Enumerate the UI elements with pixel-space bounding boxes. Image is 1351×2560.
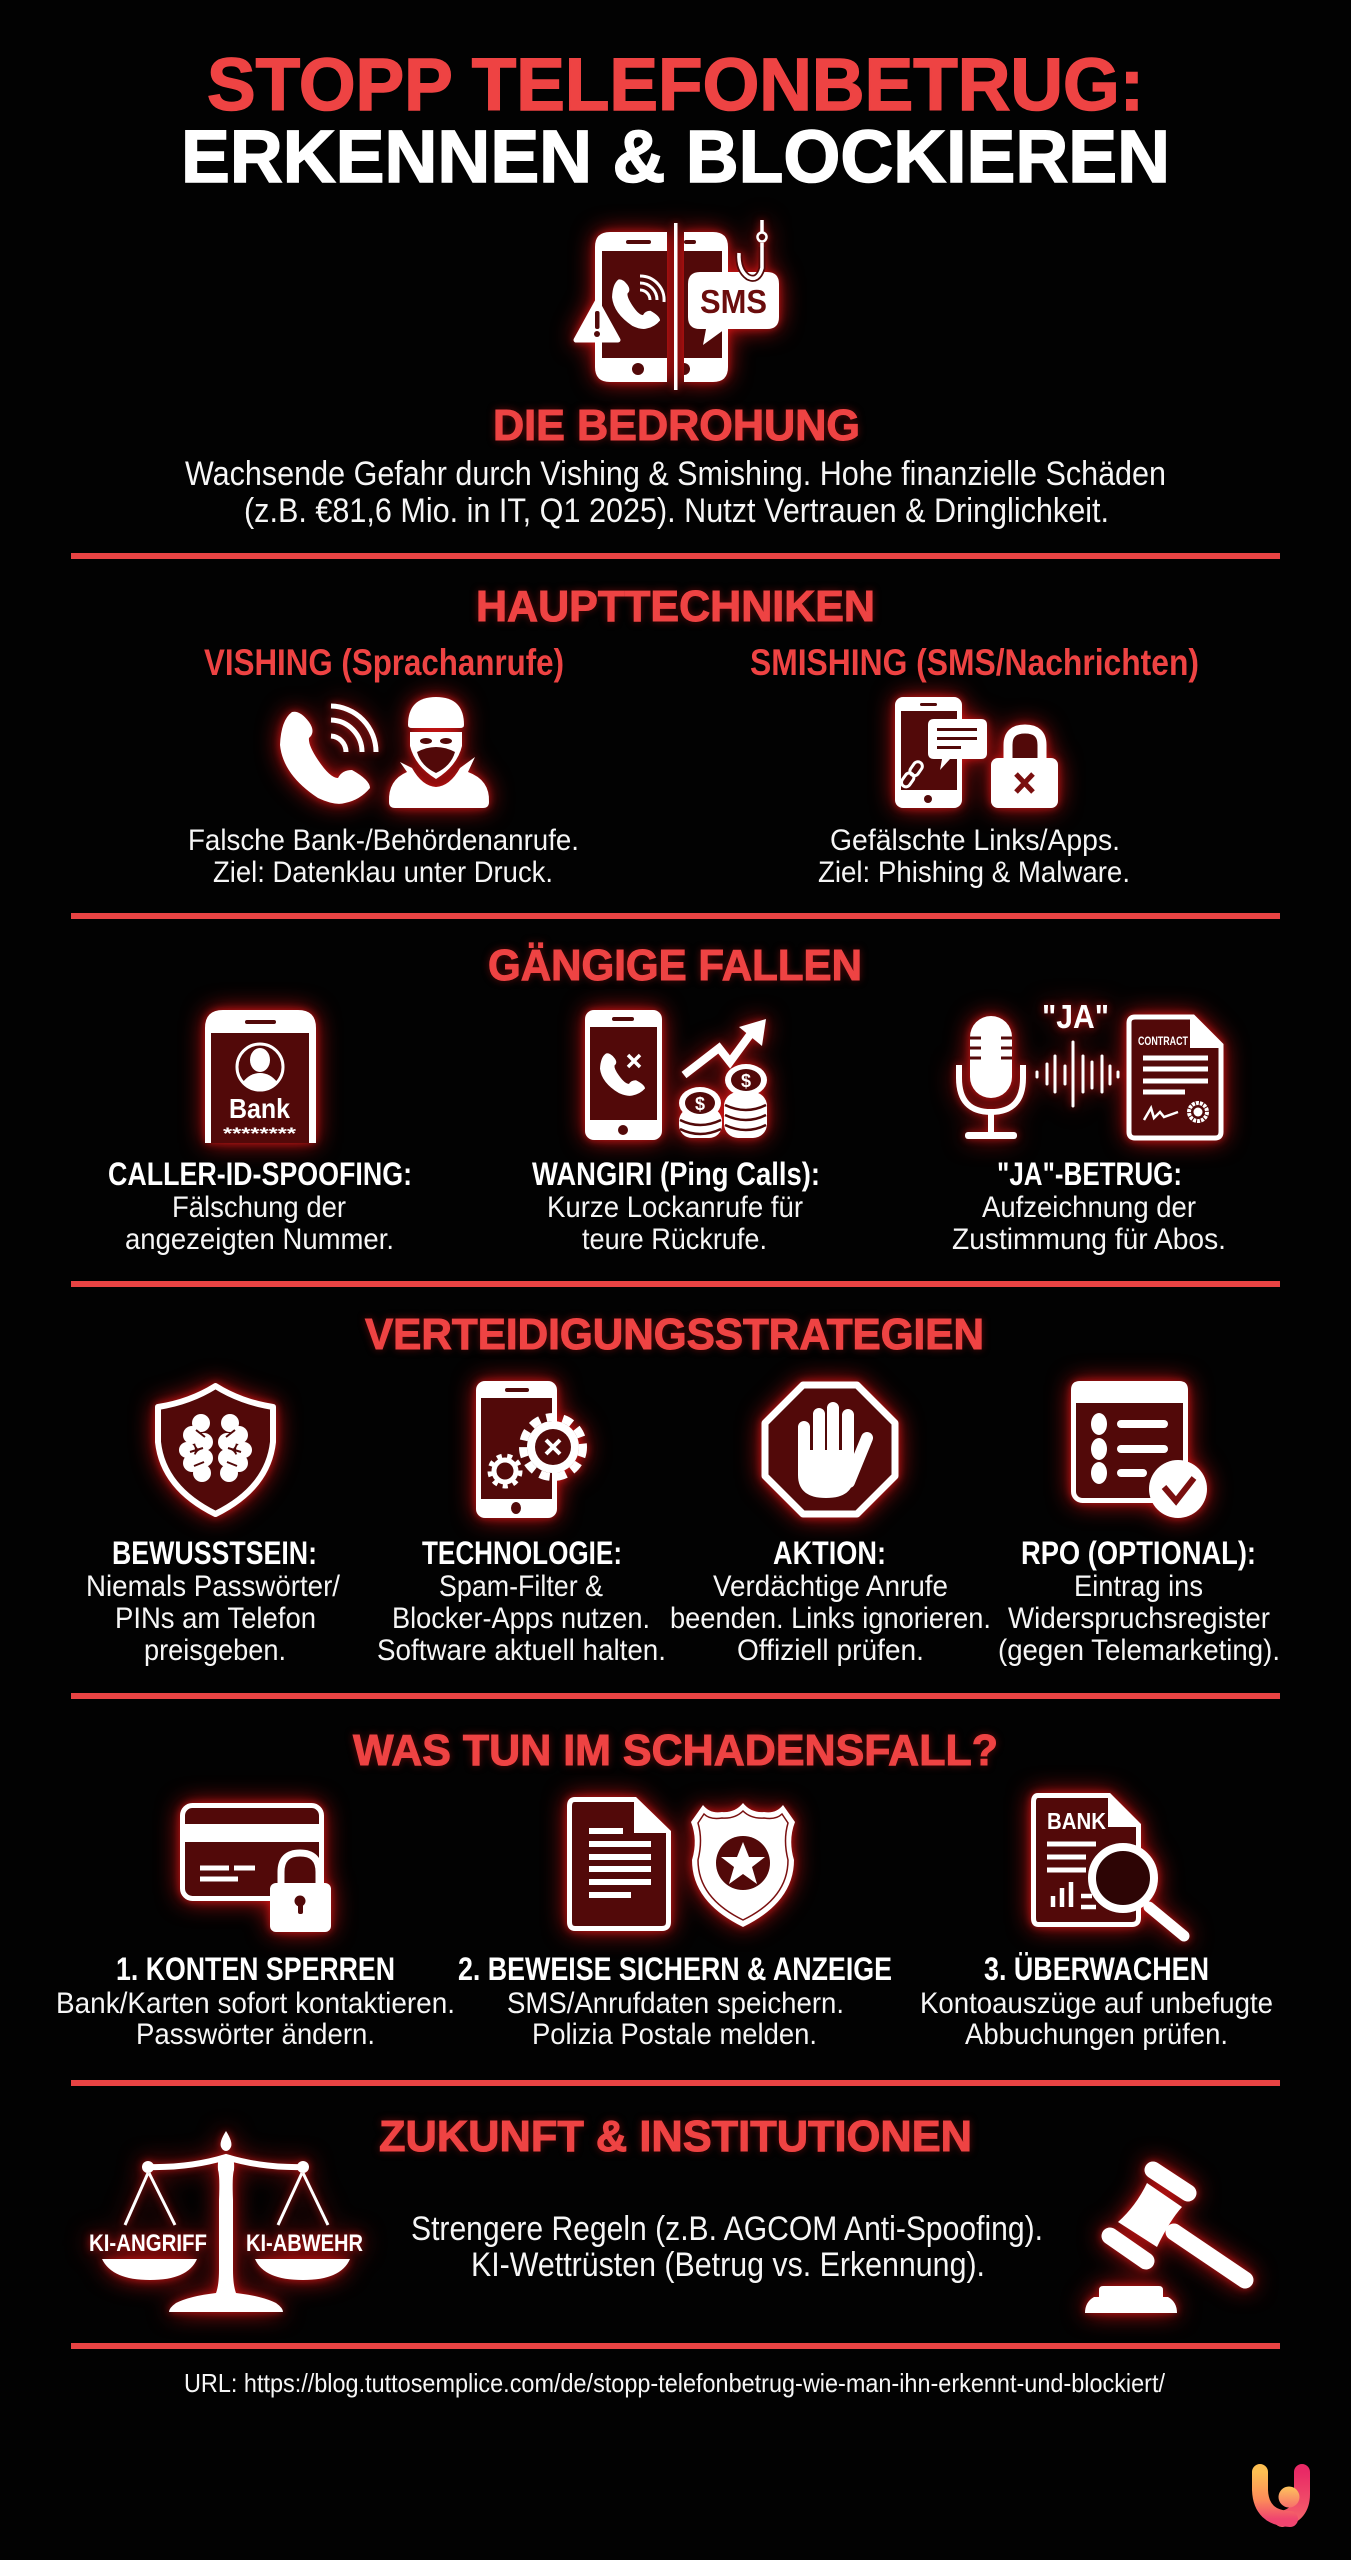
text: future description [411,2210,1043,2284]
icon: wangiri phone, rising arrow, coins: $ [741,1071,751,1091]
text: action: beenden. Links ignorieren. [670,1602,991,1635]
text: source URL: URL: https://blog.tuttosemplice.com/de/stopp-telefonbetrug-wie-man-ihn-erkennt-und-blockiert/ [184,2368,1166,2398]
icon: document and police badge [570,1798,795,1928]
text: technology [377,1535,666,1667]
icon: checklist with check mark [1071,1381,1207,1518]
text: step 2: SMS/Anrufdaten speichern. [507,1987,844,2020]
icon: spoofed bank caller [205,1010,316,1143]
icon: microphone, JA waveform, contract: "JA" [1042,998,1109,1035]
text: technology: Spam-Filter & [439,1570,603,1603]
panel: defense strategies [86,1310,1280,1667]
icon: judge gavel [1085,2170,1245,2313]
icon: shield with brain [158,1386,273,1514]
icon: stop sign with hand [765,1385,895,1514]
text: technology: Blocker-Apps nutzen. [392,1602,650,1635]
text: step 3: Abbuchungen prüfen. [965,2018,1228,2051]
panel: threat [185,401,1166,530]
text: smishing description [818,824,1130,889]
icon: phone with gears [476,1381,583,1518]
icon: spoofed bank caller: ******** [223,1124,297,1143]
text: step 3 [920,1951,1273,2051]
heading: threat: DIE BEDROHUNG [493,401,860,450]
text: vishing description: Ziel: Datenklau unter Druck. [213,856,553,889]
subheading: vishing: VISHING (Sprachanrufe) [204,642,564,683]
icon: brand logo [1260,2472,1302,2519]
text: RPO [998,1535,1280,1667]
text: RPO: Widerspruchsregister [1008,1602,1270,1635]
icon: wangiri phone, rising arrow, coins: $ [695,1094,705,1114]
text: step 2: 2. BEWEISE SICHERN & ANZEIGE [458,1951,892,1987]
panel: what to do in case of damage [56,1726,1273,2051]
text: vishing description: Falsche Bank-/Behördenanrufe. [188,824,579,857]
text: step 3: 3. ÜBERWACHEN [984,1951,1209,1987]
text: technology: Software aktuell halten. [377,1634,666,1667]
text: caller-id spoofing [108,1156,412,1256]
text: wangiri [532,1156,820,1256]
text: RPO: Eintrag ins [1074,1570,1203,1603]
icon: split phone with call, warning, SMS and hook [576,220,779,390]
text: RPO: (gegen Telemarketing). [998,1634,1280,1667]
icon: scales of AI attack vs defense: KI-ANGRIFF [89,2230,207,2257]
text: awareness: PINs am Telefon [115,1602,316,1635]
text: wangiri: Kurze Lockanrufe für [547,1191,803,1224]
panel: future and institutions [89,2112,1245,2313]
icon: bank card with padlock [182,1806,331,1932]
heading: main techniques: HAUPTTECHNIKEN [476,582,875,631]
text: threat description: Wachsende Gefahr durch Vishing & Smishing. Hohe finanzielle Schäden [185,455,1166,493]
panel: main techniques [188,582,1199,889]
icon: spoofed bank caller: Bank [229,1093,290,1124]
text: step 1 [56,1951,455,2051]
text: awareness [86,1535,341,1667]
heading: future and institutions: ZUKUNFT & INSTITUTIONEN [379,2112,972,2161]
text: step 2: Polizia Postale melden. [532,2018,817,2051]
text: JA scam: "JA"-BETRUG: [997,1156,1182,1192]
panel: common traps [108,941,1226,1256]
icon: phone call and masked thief [280,697,489,808]
title [181,43,1170,198]
subheading: smishing: SMISHING (SMS/Nachrichten) [750,642,1199,683]
icon: microphone, JA waveform, contract [959,998,1221,1139]
text: wangiri: teure Rückrufe. [582,1223,767,1256]
text: action [670,1535,991,1667]
text: awareness: BEWUSSTSEIN: [112,1535,317,1571]
text: smishing description: Gefälschte Links/Apps. [830,824,1120,857]
text: awareness: Niemals Passwörter/ [86,1570,341,1603]
icon: microphone, JA waveform, contract: CONTRACT [1138,1036,1188,1048]
icon: bank statement with magnifier: BANK [1047,1808,1106,1834]
text: vishing description [188,824,579,889]
icon: scales of AI attack vs defense: KI-ABWEHR [246,2230,363,2257]
icon: bank statement with magnifier [1034,1794,1184,1936]
text: step 1: Passwörter ändern. [136,2018,375,2051]
text: technology: TECHNOLOGIE: [422,1535,622,1571]
icon: wangiri phone, rising arrow, coins [585,1010,767,1140]
text: step 1: 1. KONTEN SPERREN [116,1951,395,1987]
text: step 3: Kontoauszüge auf unbefugte [920,1987,1273,2020]
text: future description: KI-Wettrüsten (Betrug vs. Erkennung). [471,2246,985,2284]
text: future description: Strengere Regeln (z.B. AGCOM Anti-Spoofing). [411,2210,1043,2248]
text: step 2 [458,1951,892,2051]
text: threat description: (z.B. €81,6 Mio. in IT, Q1 2025). Nutzt Vertrauen & Dringlichkeit. [244,492,1109,530]
text: JA scam: Zustimmung für Abos. [952,1223,1226,1256]
text: action: Verdächtige Anrufe [713,1570,948,1603]
text: action: AKTION: [773,1535,886,1571]
text: action: Offiziell prüfen. [737,1634,924,1667]
text: caller-id spoofing: angezeigten Nummer. [125,1223,394,1256]
text: smishing description: Ziel: Phishing & Malware. [818,856,1130,889]
text: wangiri: WANGIRI (Ping Calls): [532,1156,820,1192]
heading: damage steps: WAS TUN IM SCHADENSFALL? [353,1726,998,1775]
text: caller-id spoofing: CALLER-ID-SPOOFING: [108,1156,412,1192]
icon: scales of AI attack vs defense [89,2131,363,2312]
title: STOPP TELEFONBETRUG: [207,43,1144,126]
heading: common traps: GÄNGIGE FALLEN [488,941,862,990]
text: JA scam [952,1156,1226,1256]
icon: phone message link and locked padlock [895,697,1058,808]
text: step 1: Bank/Karten sofort kontaktieren. [56,1987,455,2020]
text: JA scam: Aufzeichnung der [982,1191,1196,1224]
text: awareness: preisgeben. [144,1634,286,1667]
text: threat description [185,455,1166,530]
heading: defense strategies: VERTEIDIGUNGSSTRATEGIEN [365,1310,984,1359]
icon: split phone with call, warning, SMS and hook: SMS [700,283,767,320]
title: ERKENNEN & BLOCKIEREN [181,115,1170,198]
text: caller-id spoofing: Fälschung der [172,1191,346,1224]
text: RPO: RPO (OPTIONAL): [1021,1535,1256,1571]
